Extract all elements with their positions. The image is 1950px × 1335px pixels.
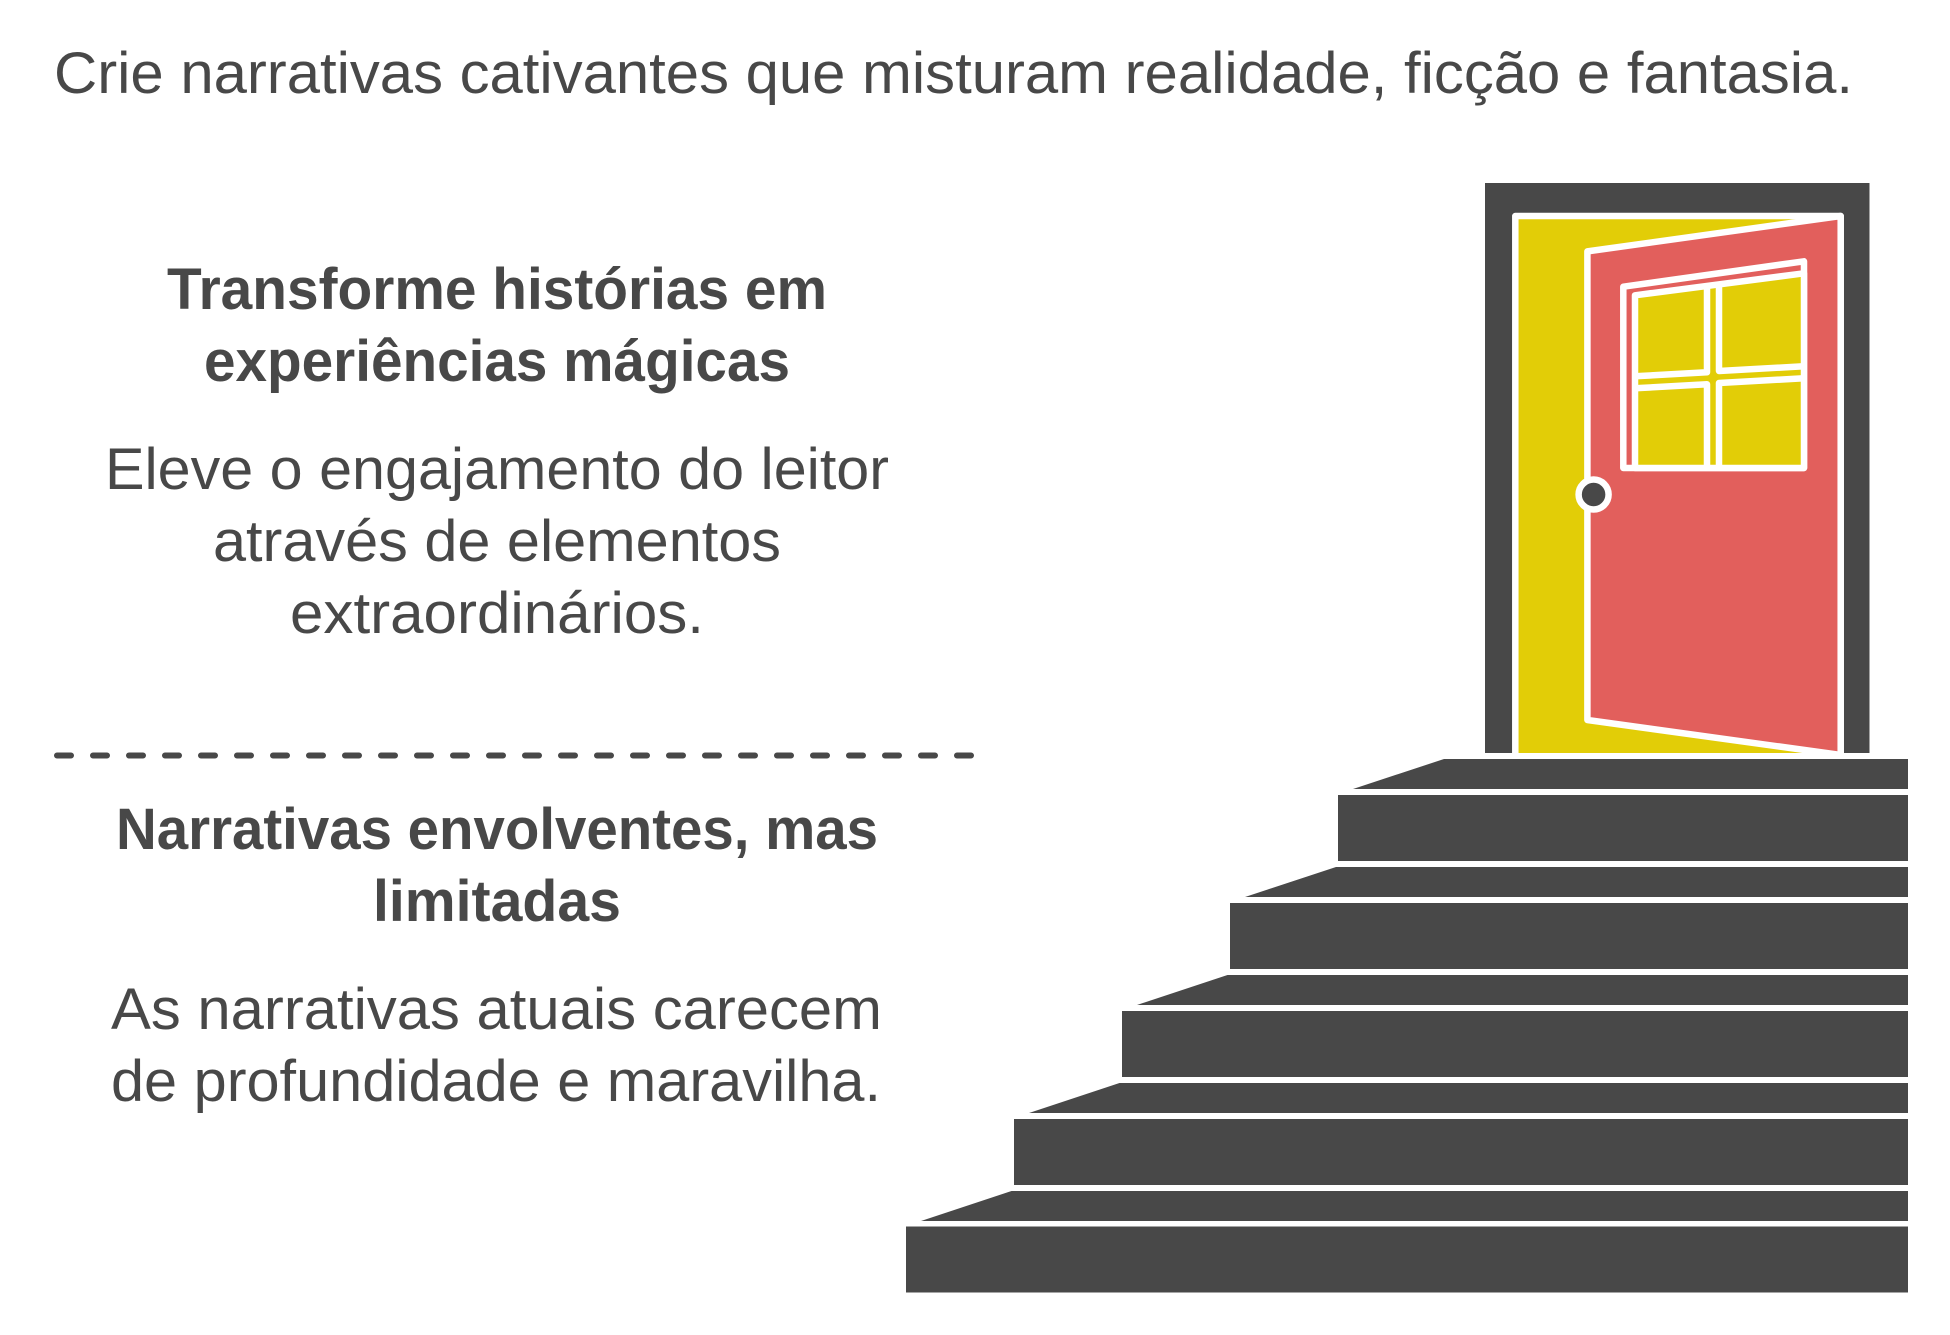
heading: transform stories: Transforme histórias em — [167, 257, 827, 322]
text block: lacking depth: As narrativas atuais carecem — [111, 977, 882, 1042]
step 4 — [1014, 1083, 1908, 1185]
icon: staircase — [906, 759, 1908, 1292]
door opening — [1515, 216, 1841, 753]
text block: elevate engagement: extraordinários. — [290, 581, 704, 646]
door knob — [1579, 480, 1609, 510]
heading: transform stories: experiências mágicas — [204, 329, 790, 394]
icon: open door — [1480, 183, 1880, 759]
heading: engaging but limited: limitadas — [373, 869, 621, 934]
step 3 — [1122, 975, 1908, 1077]
panel: transformed stories — [105, 257, 889, 646]
text block: elevate engagement: através de elementos — [213, 509, 781, 574]
heading: engaging but limited — [116, 797, 878, 934]
step 2 — [1230, 867, 1908, 969]
text block: lacking depth: de profundidade e maravilha. — [111, 1049, 881, 1114]
door leaf — [1587, 216, 1841, 755]
text block: elevate engagement: Eleve o engajamento do leitor — [105, 437, 889, 502]
window — [1623, 261, 1804, 468]
step 1 — [1338, 759, 1908, 861]
text block: elevate engagement — [105, 437, 889, 646]
title: Crie narrativas cativantes que misturam realidade, ficção e fantasia. — [54, 41, 1853, 106]
heading: transform stories — [167, 257, 827, 394]
panel: limited narratives — [111, 797, 882, 1114]
heading: engaging but limited: Narrativas envolventes, mas — [116, 797, 878, 862]
step 5 — [906, 1191, 1908, 1292]
text block: lacking depth — [111, 977, 882, 1114]
door frame — [1485, 183, 1870, 753]
